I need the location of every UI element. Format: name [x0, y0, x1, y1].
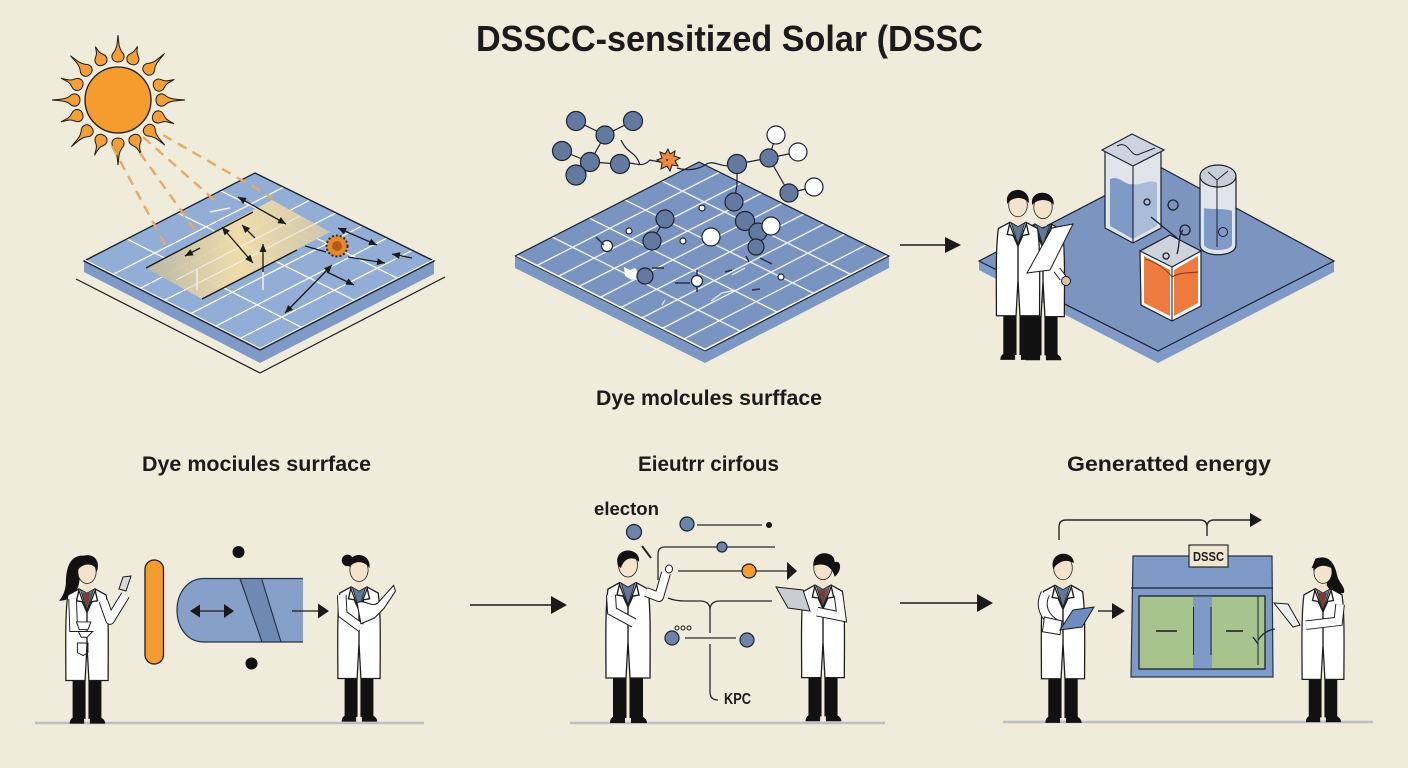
scientist: woman with book — [338, 555, 395, 722]
panel: dye molecules process — [35, 546, 424, 724]
orange box — [1140, 235, 1201, 321]
output bracket arrow — [1059, 513, 1262, 540]
clipboard — [776, 587, 810, 611]
clipboard — [1027, 224, 1073, 273]
scientist: man with laptop — [1041, 554, 1094, 723]
phone — [119, 576, 131, 591]
arrow: step 2 to step 3 — [900, 594, 993, 612]
ground outline — [76, 277, 445, 373]
molecules above panel — [552, 112, 823, 202]
ground line — [570, 722, 885, 724]
molecules on panel — [596, 193, 784, 305]
arrow into module — [1098, 603, 1125, 619]
solar panel slab — [515, 162, 889, 363]
bubbles and tube — [1144, 199, 1190, 259]
scientist: woman with tablet — [1274, 557, 1344, 722]
arrow: top middle to right — [900, 237, 961, 253]
tablet — [1274, 603, 1300, 627]
label: electron: electon — [594, 499, 659, 519]
label: step 1 heading: Dye mociules surrface — [142, 453, 371, 476]
electron nodes — [626, 517, 772, 647]
icon: orange burst — [657, 149, 680, 171]
cylinder — [1200, 165, 1236, 255]
dashed light rays — [112, 135, 273, 250]
scientist: man pointing — [606, 550, 672, 723]
label: top caption: Dye molcules surfface — [596, 387, 822, 410]
solar panel slab — [84, 173, 434, 363]
arrowhead — [787, 562, 797, 580]
panel: sunlight on solar cell — [52, 35, 445, 373]
label: KPC: KPC — [724, 691, 751, 708]
capsule shape — [177, 578, 329, 642]
double arrow — [190, 604, 234, 618]
dots — [232, 546, 258, 670]
molecule bonds — [562, 121, 814, 247]
electron arrows — [185, 197, 412, 313]
scientist: woman with phone — [59, 555, 131, 724]
panel: dye molecules on surface — [515, 112, 889, 363]
title: DSSCC-sensitized Solar (DSSC — [476, 18, 983, 59]
panel: generated energy — [1003, 513, 1373, 723]
laptop — [1060, 607, 1094, 630]
scientist: woman with clipboard — [776, 553, 844, 721]
ground line — [1003, 721, 1373, 723]
panel: electron circuit — [570, 499, 885, 723]
panel: electrolyte containers and scientists — [979, 134, 1334, 363]
icon: dye burst — [326, 236, 348, 256]
beaker: blue liquid — [1102, 134, 1164, 243]
ground line — [35, 722, 424, 724]
arrow out — [292, 604, 329, 618]
label: DSSC — [1189, 545, 1228, 567]
arrow: step 1 to step 2 — [470, 596, 567, 614]
scientists pair — [996, 190, 1073, 360]
orange pill — [145, 560, 164, 664]
circuit lines — [642, 525, 787, 700]
DSSC module — [1131, 545, 1275, 677]
platform — [979, 167, 1334, 363]
label: step 3 heading: Generatted energy — [1067, 453, 1271, 476]
icon: sun — [52, 35, 185, 165]
label: step 2 heading: Eieutrr cirfous — [638, 453, 779, 476]
label: DSSC: DSSC — [1193, 549, 1225, 564]
